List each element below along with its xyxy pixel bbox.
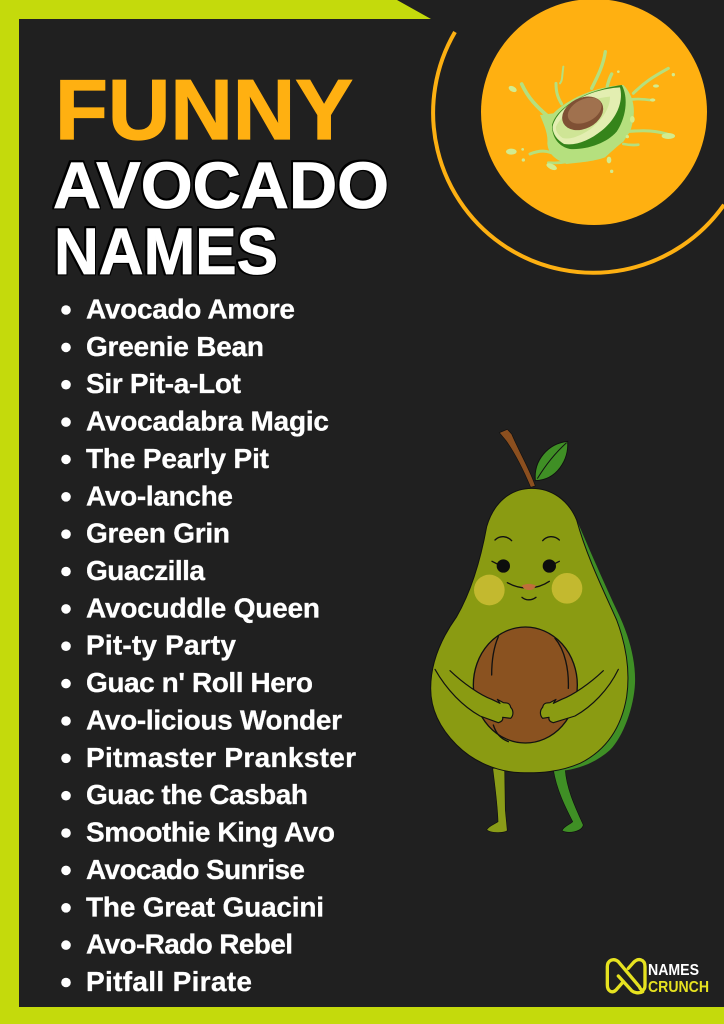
logo: Names Crunch: NAMES (648, 962, 699, 979)
list of names: Sir Pit-a-Lot (86, 368, 241, 399)
list of names: The Pearly Pit (86, 443, 269, 474)
cheeks (474, 575, 505, 605)
list of names: Guac the Casbah (86, 779, 308, 810)
list of names: The Great Guacini (86, 891, 324, 922)
leaf (535, 441, 568, 481)
list of names (61, 294, 356, 997)
splash blob (540, 85, 634, 164)
icon: avocado splash (506, 52, 675, 173)
icon: avocado character (431, 429, 635, 833)
face (492, 537, 559, 600)
logo: Names Crunch: CRUNCH (648, 979, 709, 996)
list of names: Avo-Rado Rebel (86, 929, 293, 960)
title word: AVOCADO: AVOCADO (53, 148, 389, 222)
left arm (435, 669, 513, 723)
avocado pit (556, 90, 609, 137)
list of names: Guac n' Roll Hero (86, 667, 313, 698)
list of names: Avocuddle Queen (86, 592, 320, 623)
legs (487, 768, 507, 833)
logo mark (607, 960, 645, 993)
body (431, 488, 628, 773)
title word: FUNNY: FUNNY (55, 63, 353, 158)
list of names: Green Grin (86, 518, 230, 549)
list of names: Avocado Amore (86, 294, 295, 324)
body back (557, 520, 635, 771)
list of names: Pit-ty Party (86, 630, 236, 661)
list of names: Avocadabra Magic (86, 406, 329, 437)
list of names: Avocado Sunrise (86, 854, 305, 885)
list of names: Pitmaster Prankster (86, 742, 356, 773)
list of names: Pitfall Pirate (86, 966, 252, 997)
title (53, 63, 389, 288)
list of names: Smoothie King Avo (86, 816, 335, 848)
orange circle (481, 0, 707, 225)
list of names: Avo-lanche (86, 480, 233, 511)
avocado half (552, 85, 626, 149)
stem (499, 429, 535, 487)
right arm (540, 669, 618, 723)
title word: NAMES: NAMES (54, 214, 278, 288)
list of names: Guaczilla (86, 555, 205, 586)
list of names: Greenie Bean (86, 331, 264, 362)
pit (473, 627, 577, 743)
bullets (61, 305, 71, 987)
list of names: Avo-licious Wonder (86, 704, 342, 736)
orange arc (433, 32, 724, 273)
logo: Names Crunch (607, 960, 709, 996)
